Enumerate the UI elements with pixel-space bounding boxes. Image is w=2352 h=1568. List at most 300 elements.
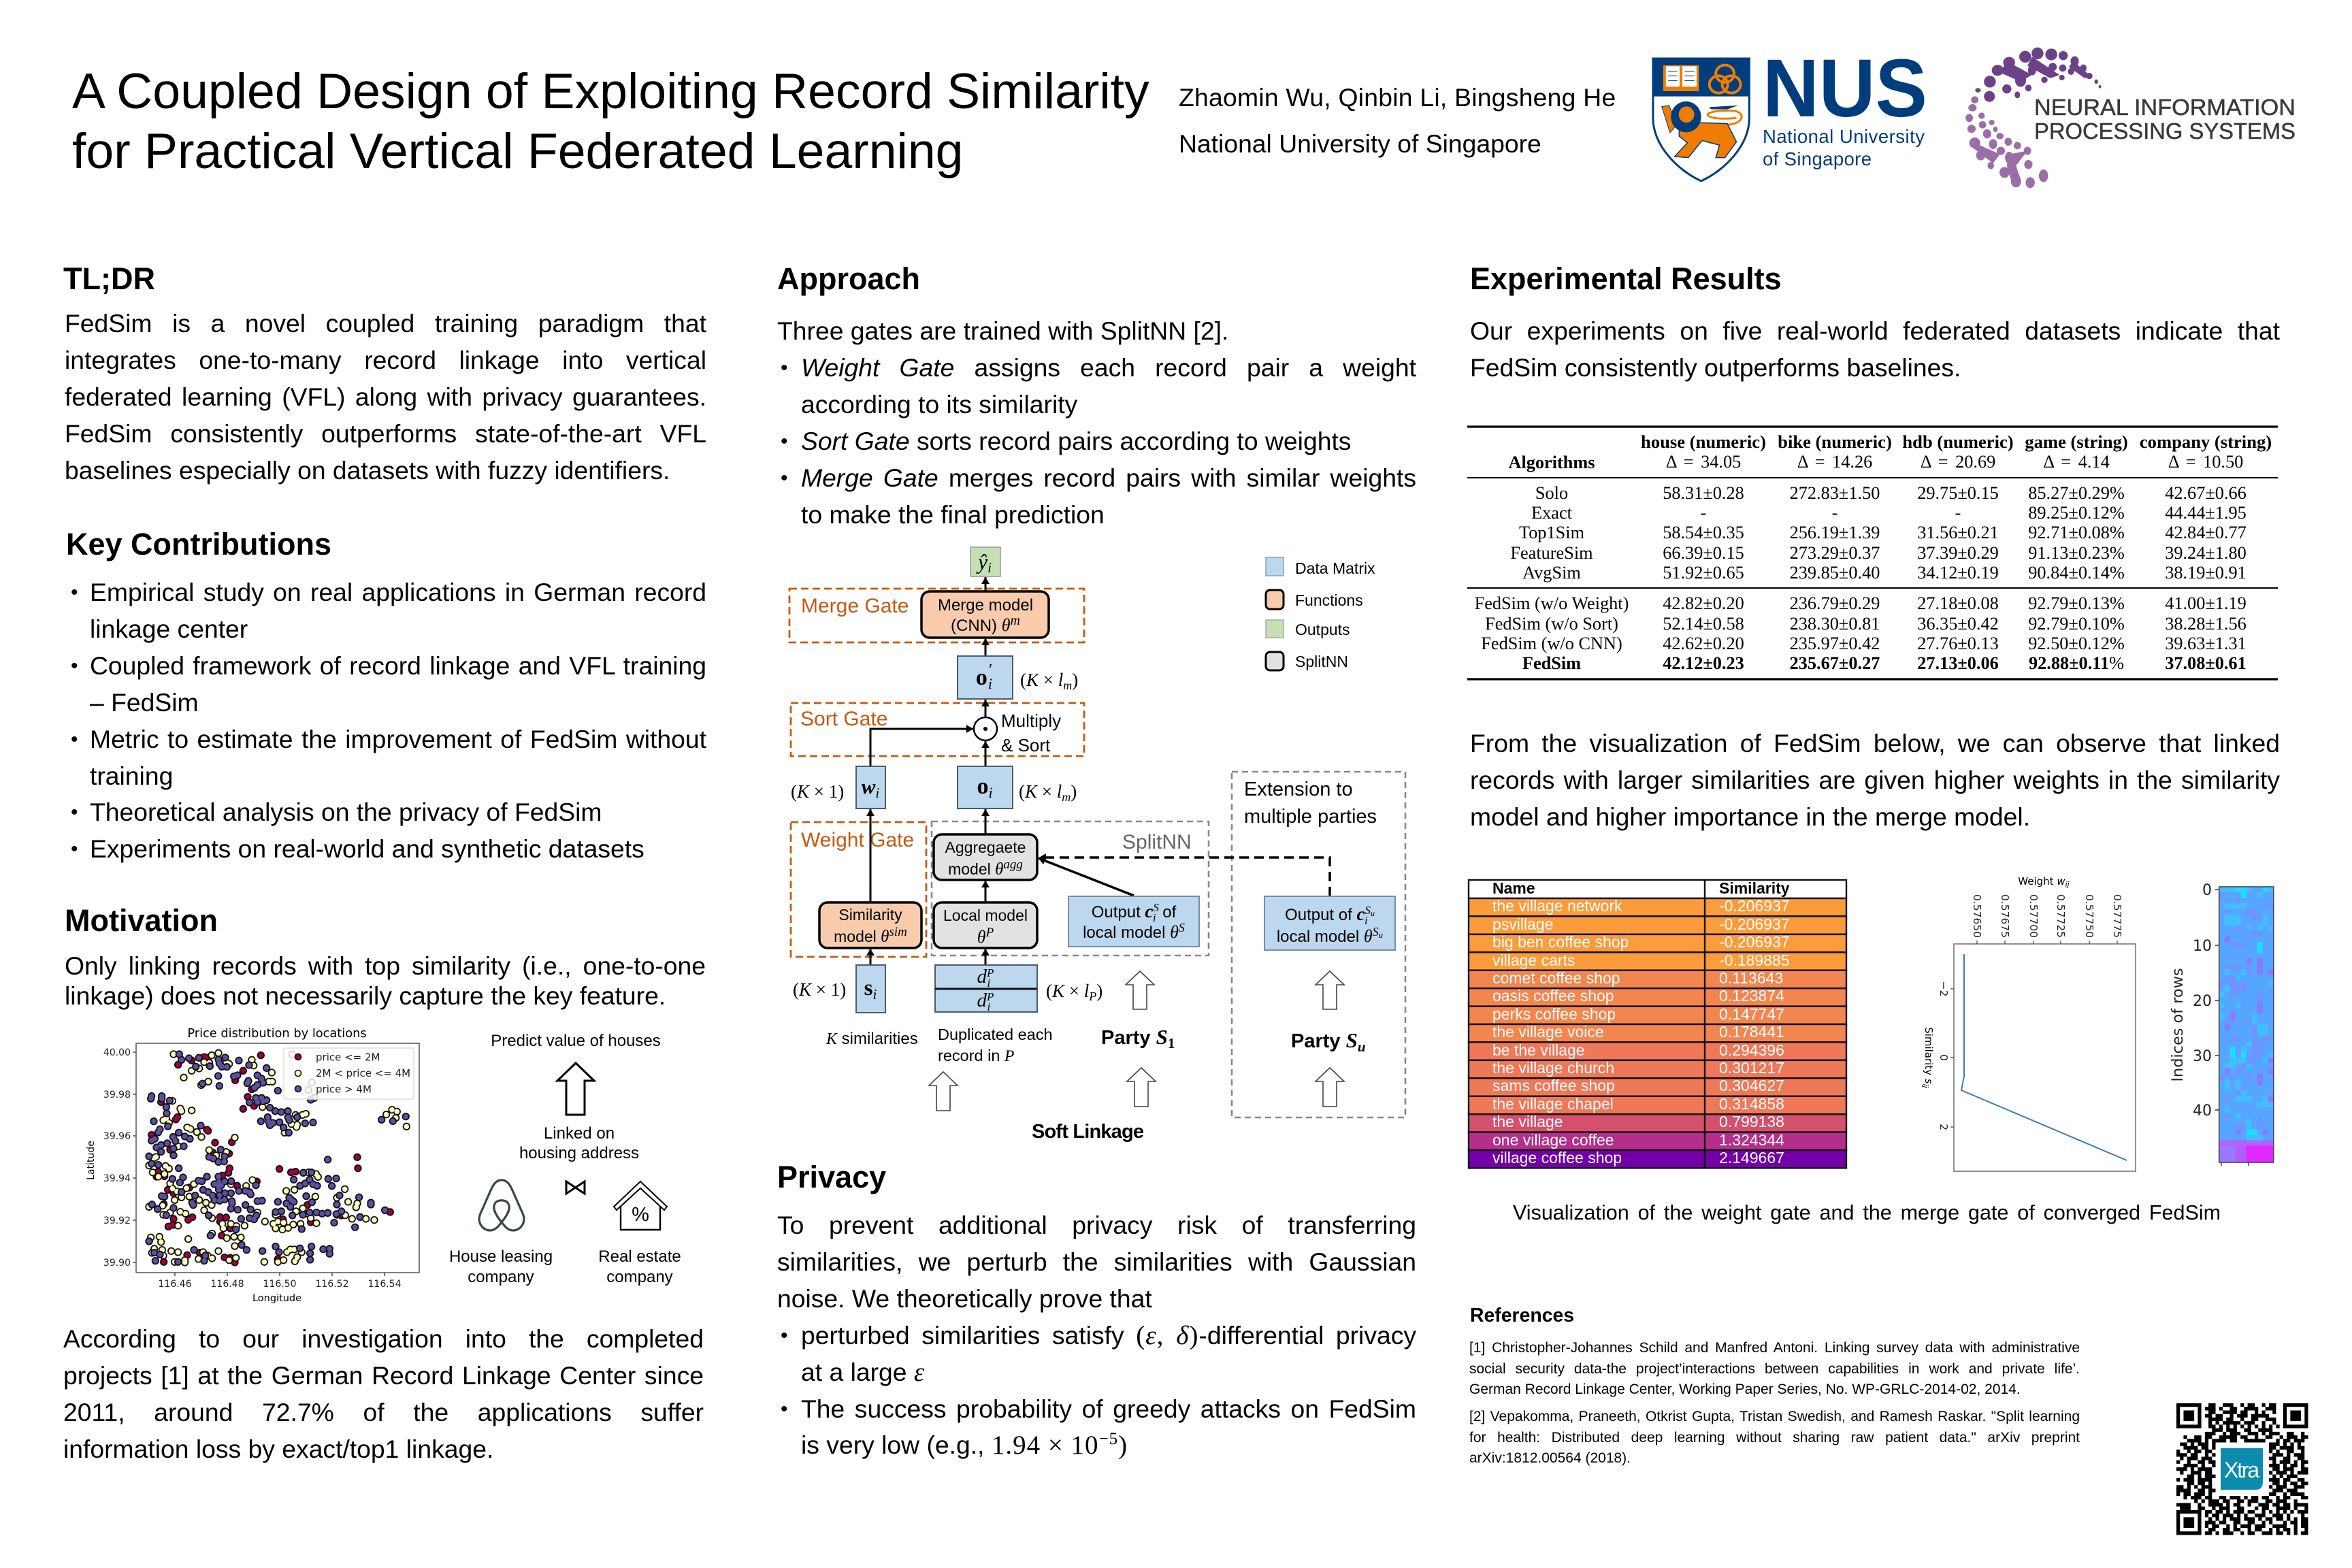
name column: comet coffee shop <box>1492 969 1620 987</box>
authors: Zhaomin Wu, Qinbin Li, Bingsheng He <box>1179 83 1616 112</box>
box: output of S_u: u <box>1379 930 1384 940</box>
heading: Privacy: Privacy <box>777 1160 886 1194</box>
reference 2: arXiv:1812.00564 (2018). <box>1469 1450 1631 1466</box>
label: K by l_m upper: ) <box>1072 670 1078 690</box>
box: duplicated d: P <box>986 966 994 979</box>
table FedSim variants: 92.79±0.10% <box>2028 614 2125 634</box>
text block: approach bullets: • <box>781 467 788 489</box>
QR modules <box>2176 1405 2308 1533</box>
QR logo: Xtra <box>2224 1458 2259 1482</box>
box: output of S_u: Output of c <box>1285 904 1365 924</box>
name column: be the village <box>1492 1041 1585 1059</box>
table baselines: 42.84±0.77 <box>2165 523 2247 542</box>
box: output of S: of <box>1158 903 1177 921</box>
legend: price > 4M <box>316 1083 372 1096</box>
table FedSim variants: 27.76±0.13 <box>1917 634 1999 653</box>
table baselines: 37.39±0.29 <box>1917 543 1999 563</box>
table header: Algorithms <box>1508 453 1595 472</box>
label: K by l_m upper: (K × l <box>1020 670 1063 690</box>
table baselines: 44.44±1.95 <box>2165 503 2247 523</box>
table rules <box>1467 427 2278 679</box>
table FedSim variants: 39.63±1.31 <box>2165 634 2247 653</box>
y axis label: Latitude <box>86 1141 97 1180</box>
y tick labels: 39.94 <box>103 1173 131 1184</box>
text block: approach bullets: to make the final prediction <box>801 500 1105 529</box>
box: similarity model <box>819 902 921 948</box>
table baselines: 31.56±0.21 <box>1917 523 1999 542</box>
label: house leasing company: House leasing <box>449 1247 553 1266</box>
text block: approach bullets: Merge Gate merges record pairs with similar weights <box>801 463 1416 492</box>
NUS sub-wordmark <box>1763 126 1925 169</box>
name column: the village chapel <box>1492 1095 1614 1113</box>
box: w_i: i <box>875 785 879 801</box>
table FedSim variants <box>1475 593 2247 673</box>
name column: village carts <box>1492 951 1575 969</box>
text block: motivation findings: According to our investigation into the completed <box>63 1324 704 1353</box>
label: party Su: Party S <box>1291 1028 1358 1052</box>
table FedSim variants: 92.88±0.11% <box>2029 653 2124 673</box>
x tick labels: 116.50 <box>263 1279 297 1290</box>
top tick labels <box>1971 894 2123 938</box>
left tick labels: 0 <box>1938 1054 1950 1061</box>
box: local model <box>934 902 1037 948</box>
table header: Δ = 10.50 <box>2168 452 2243 472</box>
name column: the village voice <box>1492 1023 1604 1041</box>
similarity column: 2.149667 <box>1719 1149 1784 1166</box>
label: real estate company: company <box>606 1268 673 1286</box>
box: o prime: o <box>976 665 987 690</box>
table FedSim variants: 92.50±0.12% <box>2028 634 2125 653</box>
name column <box>1492 897 1629 1166</box>
NeurIPS wordmark: PROCESSING SYSTEMS <box>2034 118 2296 144</box>
table baselines: Top1Sim <box>1519 523 1585 542</box>
label: weight gate: Weight Gate <box>801 829 914 851</box>
text block: results intro <box>1470 316 2280 382</box>
text block: motivation findings: projects [1] at the German Record Linkage Center since <box>63 1361 704 1390</box>
legend: diagram key: Functions <box>1295 591 1363 609</box>
list: key contributions: Empirical study on real applications in German record <box>90 578 706 606</box>
figure: record linkage illustration <box>449 1032 681 1286</box>
similarity column: 0.301217 <box>1719 1059 1784 1077</box>
box: output of S_u: local model θ <box>1277 926 1373 946</box>
x tick labels: 116.54 <box>368 1279 402 1290</box>
NUS wordmark: NUS <box>1763 42 1927 134</box>
text: • <box>71 728 78 751</box>
name column: village coffee shop <box>1492 1149 1622 1166</box>
top axis title: ij <box>2065 880 2070 889</box>
y tick labels: 39.90 <box>103 1258 131 1269</box>
NUS sub-wordmark: of Singapore <box>1763 148 1872 169</box>
box: duplicated d: d <box>977 966 987 987</box>
panel: SplitNN <box>932 821 1209 956</box>
box: aggregate model: model θ <box>948 860 1003 879</box>
table FedSim variants: FedSim (w/o Sort) <box>1485 614 1618 634</box>
left axis title: Similarity s <box>1923 1027 1935 1084</box>
table baselines: 273.29±0.37 <box>1790 543 1880 563</box>
box: local model: P <box>985 926 994 940</box>
top tick labels: 0.57675 <box>1999 894 2011 938</box>
box: o prime: i <box>988 675 992 692</box>
box: output of S: i <box>1153 911 1156 924</box>
name column: the village network <box>1492 897 1622 915</box>
text block: motivation findings: information loss by exact/top1 linkage. <box>63 1435 493 1463</box>
tick labels: 40 <box>2193 1102 2212 1120</box>
table FedSim variants: 238.30±0.81 <box>1790 614 1880 634</box>
tick labels: 30 <box>2193 1048 2212 1065</box>
chart title: Price distribution by locations <box>187 1026 367 1041</box>
list: key contributions: Experiments on real-world and synthetic datasets <box>90 834 644 863</box>
label: real estate company <box>598 1247 681 1286</box>
reference 1: social security data-the project’interactions between capabilities in work and private life’. <box>1469 1361 2080 1376</box>
title: for Practical Vertical Federated Learning <box>72 123 964 179</box>
label: linked on housing address: housing address <box>519 1144 639 1162</box>
text block: TL;DR summary: FedSim consistently outperforms state-of-the-art VFL <box>65 419 706 448</box>
label: K similarities: K similarities <box>826 1030 918 1048</box>
similarity column: 0.147747 <box>1719 1005 1784 1023</box>
heat cells <box>2219 887 2274 1162</box>
table baselines: 272.83±1.50 <box>1790 483 1880 503</box>
text block: approach bullets: • <box>781 430 788 453</box>
list: key contributions <box>71 578 706 863</box>
box: output of S <box>1068 896 1199 947</box>
label: linked on housing address: Linked on <box>544 1124 615 1143</box>
label: K by l_m lower: m <box>1062 790 1071 804</box>
box: output of S: Output c <box>1092 901 1153 921</box>
table baselines: 51.92±0.65 <box>1663 563 1744 583</box>
box: similarity model: sim <box>889 925 907 939</box>
left axis title: ij <box>1921 1084 1930 1089</box>
label: extension <box>1244 779 1377 828</box>
legend: diagram key: Data Matrix <box>1295 559 1375 577</box>
x tick labels <box>158 1279 402 1290</box>
text block: privacy: • <box>781 1324 788 1347</box>
panel: extension to multiple parties <box>1232 772 1405 1117</box>
icon: join symbol <box>566 1181 585 1194</box>
legend: 2M < price <= 4M <box>316 1067 410 1079</box>
text block: approach bullets: according to its similarity <box>801 390 1077 419</box>
table baselines: 29.75±0.15 <box>1917 483 1999 503</box>
box: merge model: m <box>1010 613 1020 628</box>
label: multiply and sort: & Sort <box>1001 735 1051 755</box>
text: • <box>71 838 78 860</box>
table: experimental results <box>1467 427 2278 679</box>
top tick labels: 0.57725 <box>2055 894 2067 938</box>
y tick labels: 40.00 <box>103 1047 131 1058</box>
text block: approach bullets: Sort Gate sorts record pairs according to weights <box>801 427 1351 455</box>
table header <box>1508 431 2272 472</box>
heatmap: merge gate <box>2169 882 2274 1166</box>
table baselines: 58.31±0.28 <box>1663 483 1744 503</box>
table FedSim variants: 42.12±0.23 <box>1663 653 1744 673</box>
icon: real estate company: % <box>632 1204 649 1226</box>
box: output of S_u <box>1264 896 1395 950</box>
table baselines: 34.12±0.19 <box>1917 563 1999 583</box>
table FedSim variants: FedSim (w/o Weight) <box>1475 593 1629 613</box>
table FedSim variants: FedSim <box>1522 653 1581 673</box>
y tick labels: 39.96 <box>103 1131 131 1142</box>
text block: approach bullets: • <box>781 357 788 379</box>
similarity column: 0.314858 <box>1719 1095 1784 1113</box>
box: duplicated d: d <box>977 990 987 1011</box>
table FedSim variants: 41.00±1.19 <box>2165 593 2247 613</box>
y tick labels: 39.98 <box>103 1090 131 1100</box>
ticks <box>1950 941 2117 1127</box>
box: duplicated d <box>935 965 1037 1013</box>
table FedSim variants: 236.79±0.29 <box>1790 593 1880 613</box>
box: s_i <box>856 965 885 1013</box>
label: duplicated each record: Duplicated each <box>938 1026 1053 1043</box>
box: s_i: i <box>872 986 877 1002</box>
table baselines: 38.19±0.91 <box>2165 563 2247 583</box>
box: similarity model: Similarity <box>838 906 902 924</box>
text block: visualization description: From the visualization of FedSim below, we can observe that linked <box>1470 729 2280 757</box>
label: K by l_m lower: (K × l <box>1019 781 1062 802</box>
label: K by l_P: (K × l <box>1046 981 1089 1001</box>
box: output y-hat: ŷ <box>978 549 987 574</box>
line series <box>1961 954 2127 1160</box>
legend: diagram key <box>1266 557 1375 670</box>
list: key contributions: – FedSim <box>90 688 199 717</box>
text block: motivation intro: Only linking records with top similarity (i.e., one-to-one <box>65 951 706 980</box>
label: party S1: 1 <box>1168 1035 1175 1051</box>
box: output of S: local model θ <box>1083 922 1179 942</box>
legend: price <= 2M <box>316 1051 380 1063</box>
y tick labels <box>103 1047 131 1269</box>
text block: motivation intro <box>65 951 706 1010</box>
plot frame <box>1954 944 2136 1171</box>
box: merge model <box>921 591 1049 638</box>
table FedSim variants: 235.67±0.27 <box>1790 653 1880 673</box>
text: • <box>71 581 78 604</box>
name column: perks coffee shop <box>1492 1005 1616 1023</box>
header text: Similarity <box>1719 879 1790 897</box>
table FedSim variants: 52.14±0.58 <box>1663 614 1744 634</box>
x tick labels: 116.48 <box>211 1279 244 1290</box>
top tick labels: 0.57775 <box>2111 894 2123 938</box>
box: output of S_u: u <box>1371 909 1375 918</box>
similarity column: 1.324344 <box>1719 1131 1784 1149</box>
top tick labels: 0.57750 <box>2083 894 2095 938</box>
icon: NUS shield <box>1653 59 1749 181</box>
label: house leasing company: company <box>468 1268 534 1286</box>
table header: Δ = 4.14 <box>2043 452 2110 472</box>
table baselines: - <box>1955 503 1961 523</box>
box: similarity model: model θ <box>834 928 889 946</box>
arrow: up <box>557 1063 594 1115</box>
frame <box>2219 887 2274 1162</box>
ticks <box>2215 889 2249 1166</box>
table: similarity of record names <box>1469 879 1846 1168</box>
text block: privacy: is very low (e.g., 1.94 × 10−5) <box>801 1430 1128 1460</box>
top axis title: Weight w <box>2018 875 2065 887</box>
axis label: Indices of rows <box>2169 968 2187 1082</box>
table header: hdb (numeric) <box>1902 431 2014 452</box>
table FedSim variants: 37.08±0.61 <box>2165 653 2247 673</box>
text block: TL;DR summary: integrates one-to-many record linkage into vertical <box>65 346 706 374</box>
box: output of S: S <box>1153 901 1159 914</box>
title <box>72 63 1149 179</box>
box: o prime: ′ <box>989 662 992 679</box>
table baselines: FeatureSim <box>1510 543 1593 563</box>
table header: Δ = 20.69 <box>1921 452 1995 472</box>
name column: oasis coffee shop <box>1492 987 1614 1004</box>
label: house leasing company <box>449 1247 553 1286</box>
box: duplicated d: P <box>986 990 994 1003</box>
title: A Coupled Design of Exploiting Record Similarity <box>72 63 1149 119</box>
table baselines: 42.67±0.66 <box>2165 483 2247 503</box>
axis ticks <box>133 1052 385 1276</box>
table baselines: Exact <box>1531 503 1573 523</box>
legend <box>284 1048 414 1099</box>
label: linked on housing address <box>519 1124 639 1162</box>
x tick labels: 116.52 <box>316 1279 348 1290</box>
table header: company (string) <box>2140 431 2272 452</box>
row fills <box>1469 880 1846 1168</box>
text block: privacy: noise. We theoretically prove that <box>777 1284 1152 1313</box>
label: party Su: u <box>1358 1039 1366 1055</box>
plot frame <box>136 1043 419 1273</box>
label: party S1: Party S <box>1101 1025 1168 1049</box>
label: predict value: Predict value of houses <box>491 1032 661 1050</box>
panel: merge gate <box>789 589 1084 642</box>
text block: approach bullets: Three gates are trained with SplitNN [2]. <box>777 316 1228 345</box>
text block: results intro: Our experiments on five real-world federated datasets indicate that <box>1470 316 2280 345</box>
label: SplitNN: SplitNN <box>1122 831 1192 853</box>
text block: visualization description: model and higher importance in the merge model. <box>1470 802 2030 831</box>
heading: Motivation: Motivation <box>65 903 218 938</box>
box: output of S: S <box>1179 921 1185 934</box>
similarity column: 0.178441 <box>1719 1023 1784 1041</box>
header text: Name <box>1492 879 1535 897</box>
table baselines: - <box>1832 503 1838 523</box>
box: aggregate model <box>934 834 1037 880</box>
NUS sub-wordmark: National University <box>1763 126 1925 147</box>
reference 1: German Record Linkage Center, Working Paper Series, No. WP-GRLC-2014-02, 2014. <box>1469 1382 2021 1397</box>
label: multiply and sort <box>1001 710 1061 755</box>
table baselines: 256.19±1.39 <box>1790 523 1880 542</box>
list: key contributions: Theoretical analysis on the privacy of FedSim <box>90 798 602 826</box>
list: key contributions: Coupled framework of record linkage and VFL training <box>90 651 706 680</box>
text block: privacy <box>777 1211 1416 1460</box>
text block: visualization description <box>1470 729 2280 831</box>
text: • <box>71 801 78 823</box>
text block: TL;DR summary: FedSim is a novel coupled training paradigm that <box>65 309 706 338</box>
similarity column: -0.206937 <box>1719 897 1790 915</box>
heading: Approach: Approach <box>777 261 920 296</box>
name column: big ben coffee shop <box>1492 933 1629 951</box>
box: o_i: o <box>977 774 988 799</box>
list: key contributions: Metric to estimate the improvement of FedSim without <box>90 725 706 753</box>
tick labels: 10 <box>2193 938 2212 955</box>
text block: approach bullets <box>777 316 1416 529</box>
line chart: weight vs similarity <box>1921 875 2136 1171</box>
table header: Δ = 34.05 <box>1666 452 1741 472</box>
similarity column: 0.123874 <box>1719 987 1784 1004</box>
icon: real estate company <box>614 1181 667 1230</box>
icon: house leasing company <box>479 1180 524 1230</box>
table baselines: - <box>1701 503 1706 523</box>
header text <box>1492 879 1790 897</box>
label: merge gate: Merge Gate <box>801 595 909 617</box>
similarity column: -0.189885 <box>1719 951 1790 969</box>
box: local model: θ <box>977 927 986 947</box>
top tick labels: 0.57650 <box>1971 894 1983 938</box>
label: multiply and sort: Multiply <box>1001 710 1061 731</box>
label: K by l_m lower: ) <box>1071 781 1077 802</box>
table baselines: Solo <box>1535 483 1568 503</box>
reference 2: for health: Distributed deep learning without sharing raw patient data." arXiv preprint <box>1469 1429 2080 1446</box>
name column: the village <box>1492 1113 1563 1130</box>
table header: house (numeric) <box>1641 431 1766 452</box>
heading: TL;DR: TL;DR <box>63 261 155 296</box>
table header: Δ = 14.26 <box>1797 452 1872 472</box>
label: K by l_P: P <box>1088 990 1096 1003</box>
text block: approach bullets: Weight Gate assigns each record pair a weight <box>801 353 1416 382</box>
table baselines: 91.13±0.23% <box>2028 543 2125 563</box>
box: local model: Local model <box>943 906 1028 924</box>
reference 2 <box>1469 1409 2080 1466</box>
text block: privacy: similarities, we perturb the similarities with Gaussian <box>777 1247 1416 1276</box>
similarity column <box>1719 897 1790 1166</box>
box: output of S_u: S <box>1365 904 1371 917</box>
box: output y-hat <box>970 547 1000 576</box>
tick labels <box>2193 882 2212 1120</box>
table FedSim variants: FedSim (w/o CNN) <box>1481 634 1622 653</box>
figure caption: Visualization of the weight gate and the merge gate of converged FedSim <box>1513 1201 2221 1224</box>
label: soft linkage: Soft Linkage <box>1032 1121 1144 1143</box>
label: real estate company: Real estate <box>598 1247 681 1266</box>
legend: diagram key: SplitNN <box>1295 653 1348 670</box>
similarity column: 0.304627 <box>1719 1077 1784 1094</box>
heading: References: References <box>1470 1305 1574 1326</box>
table FedSim variants: 36.35±0.42 <box>1917 614 1999 634</box>
table header: bike (numeric) <box>1778 431 1892 452</box>
table baselines: 58.54±0.35 <box>1663 523 1744 542</box>
text block: TL;DR summary <box>65 309 706 485</box>
list: key contributions: linkage center <box>90 615 248 643</box>
affiliation: National University of Singapore <box>1179 129 1541 158</box>
text block: visualization description: records with larger similarities are given higher weights in the similarity <box>1470 766 2280 794</box>
label: extension: Extension to <box>1244 779 1353 800</box>
QR code <box>2176 1405 2308 1533</box>
text block: TL;DR summary: federated learning (VFL) along with privacy guarantees. <box>65 382 706 411</box>
table FedSim variants: 235.97±0.42 <box>1790 634 1880 653</box>
text block: results intro: FedSim consistently outperforms baselines. <box>1470 353 1961 382</box>
box: aggregate model: Aggregaete <box>945 838 1026 856</box>
text block: privacy: • <box>781 1398 788 1420</box>
box: output of S_u: S <box>1373 925 1379 938</box>
legend: diagram key: Outputs <box>1295 621 1350 638</box>
reference 2: [2] Vepakomma, Praneeth, Otkrist Gupta, Tristan Swedish, and Ramesh Raskar. "Split learning <box>1469 1409 2080 1424</box>
box: o_i: i <box>988 784 993 801</box>
table header: game (string) <box>2025 431 2128 452</box>
table FedSim variants: 27.13±0.06 <box>1917 653 1999 673</box>
left tick labels <box>1938 981 1950 1130</box>
scatter points <box>149 1053 406 1262</box>
box: output y-hat: i <box>987 559 992 576</box>
box: duplicated d: i <box>987 977 990 990</box>
table FedSim variants: 38.28±1.56 <box>2165 614 2247 634</box>
box: merge model: Merge model <box>938 596 1033 615</box>
label: duplicated each record: record in P <box>938 1047 1014 1065</box>
table baselines: 90.84±0.14% <box>2028 563 2125 583</box>
reference 1: [1] Christopher-Johannes Schild and Manfred Antoni. Linking survey data with administrative <box>1469 1340 2080 1356</box>
label: K by 1 upper: (K × 1) <box>791 781 844 802</box>
table baselines <box>1510 483 2247 583</box>
tick labels: 20 <box>2193 993 2212 1010</box>
left tick labels: 2 <box>1938 1124 1950 1130</box>
text block: privacy: perturbed similarities satisfy (ε, δ)-differential privacy <box>801 1321 1416 1350</box>
